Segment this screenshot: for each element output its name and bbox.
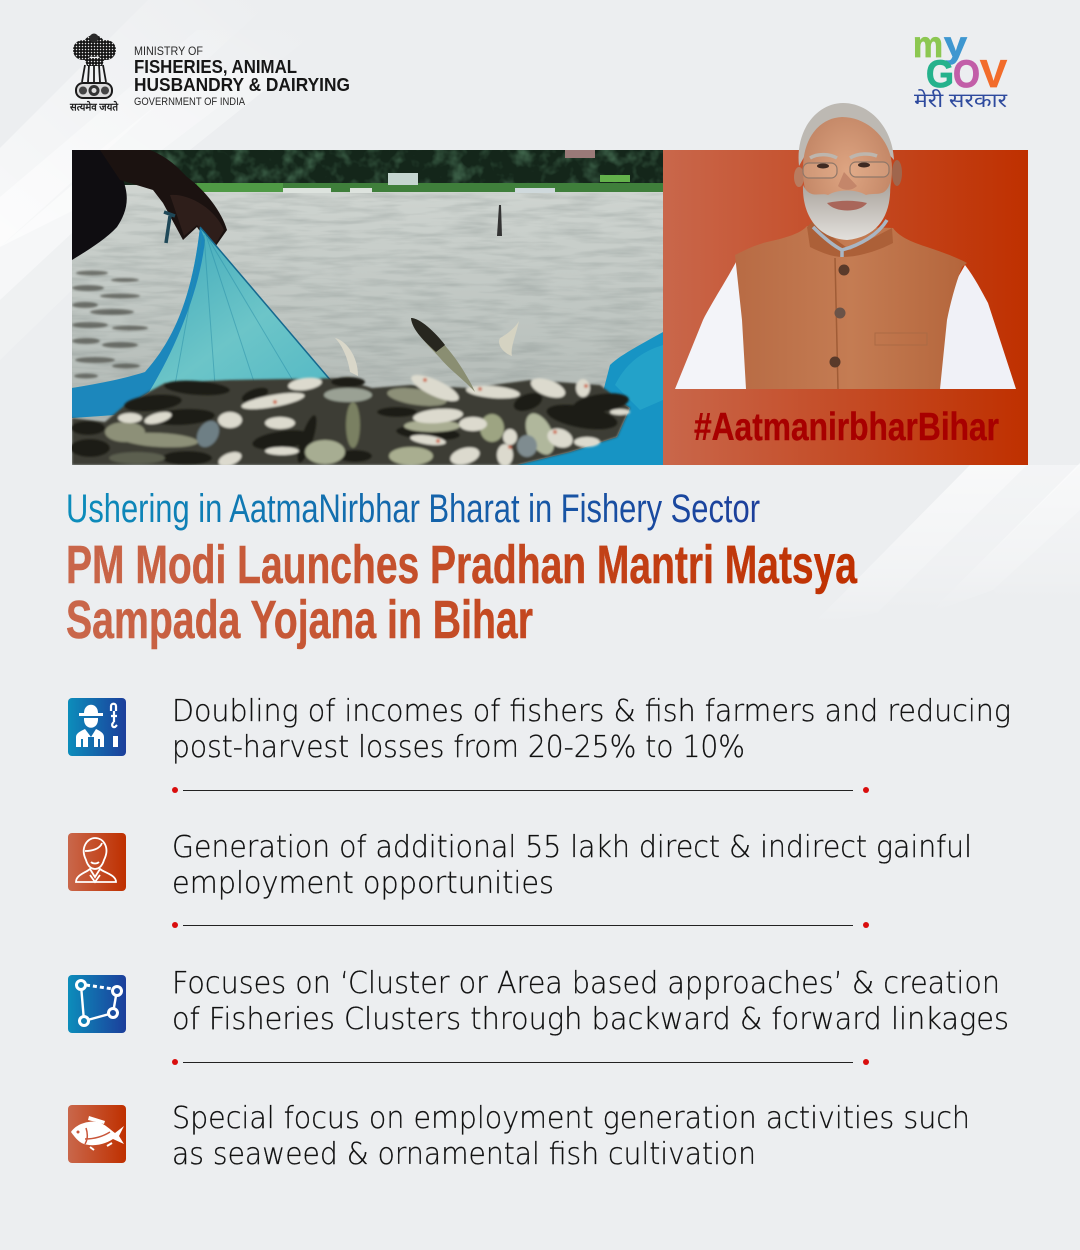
- dark fish: [70, 377, 630, 465]
- panel: orange portrait block: [663, 150, 1028, 465]
- benefit 2 text: [172, 830, 972, 901]
- title: Sampada Yojana in Bihar: [66, 590, 533, 650]
- ministry heading: FISHERIES, ANIMAL: [134, 56, 297, 77]
- logo: MyGov: m: [913, 24, 943, 65]
- ministry heading: GOVERNMENT OF INDIA: [134, 96, 246, 108]
- ministry heading: [134, 46, 350, 108]
- portrait: Prime Minister: [675, 103, 1016, 389]
- divider 3: [172, 1059, 869, 1065]
- grey olive fish: [105, 385, 560, 465]
- logo: MyGov: [913, 24, 1008, 112]
- benefit 4 text: Special focus on employment generation activities such: [172, 1101, 970, 1136]
- icon: employee: [68, 833, 126, 891]
- logo: MyGov: मेरी सरकार: [914, 89, 1008, 112]
- logo: MyGov: G: [926, 53, 954, 96]
- divider 2: [172, 922, 869, 928]
- benefit 1 text: post-harvest losses from 20-25% to 10%: [172, 730, 745, 765]
- vest: [735, 226, 967, 389]
- buttons: [838, 264, 850, 276]
- icon: fish farmer: [68, 698, 126, 756]
- red fins: [273, 378, 588, 449]
- dark ripples: [72, 270, 148, 378]
- ministry heading: HUSBANDRY & DAIRYING: [134, 74, 350, 95]
- divider 1: [172, 787, 869, 793]
- hair: [799, 103, 894, 166]
- benefit 3 text: Focuses on ‘Cluster or Area based approaches’ & creation: [172, 966, 1000, 1001]
- ears: [794, 167, 804, 187]
- leaping fish: [335, 318, 519, 392]
- benefit 3 text: [172, 966, 1009, 1037]
- icon: national emblem: [69, 34, 119, 114]
- benefit 1 text: Doubling of incomes of fishers & fish farmers and reducing: [172, 694, 1011, 729]
- logo: MyGov: O: [953, 53, 980, 96]
- eyebrows and glasses: [810, 154, 877, 158]
- pale fish: [118, 370, 630, 469]
- right blue net: [517, 332, 663, 465]
- logo: MyGov: y: [944, 24, 967, 65]
- benefit 4 text: as seaweed & ornamental fish cultivation: [172, 1137, 756, 1172]
- icon: cluster network: [68, 975, 126, 1033]
- rope: [164, 212, 175, 243]
- benefit 1 text: [172, 694, 1011, 765]
- icon: national emblem: सत्यमेव जयते: [69, 100, 119, 114]
- benefit 3 text: of Fisheries Clusters through backward & forward linkages: [172, 1002, 1009, 1037]
- benefit 4 text: [172, 1101, 970, 1172]
- benefit 2 text: employment opportunities: [172, 866, 554, 901]
- pole in water: [497, 205, 502, 236]
- logo: MyGov: V: [980, 53, 1007, 96]
- fish pile: [70, 370, 630, 469]
- tree line: [72, 150, 663, 193]
- fisher arm: [100, 150, 227, 250]
- beard: [803, 183, 890, 240]
- benefit 2 text: Generation of additional 55 lakh direct & indirect gainful: [172, 830, 972, 865]
- sleeves: [675, 260, 750, 389]
- fisher body: [72, 150, 127, 260]
- subheading: Ushering in AatmaNirbhar Bharat in Fishery Sector: [66, 487, 760, 531]
- title: [66, 535, 858, 650]
- net: [72, 227, 332, 418]
- hashtag: #AatmanirbharBihar: [694, 406, 999, 449]
- photo: fishing net and catch: [70, 150, 663, 469]
- face: [803, 117, 892, 238]
- ministry heading: MINISTRY OF: [134, 46, 203, 58]
- icon: fish: [68, 1105, 126, 1163]
